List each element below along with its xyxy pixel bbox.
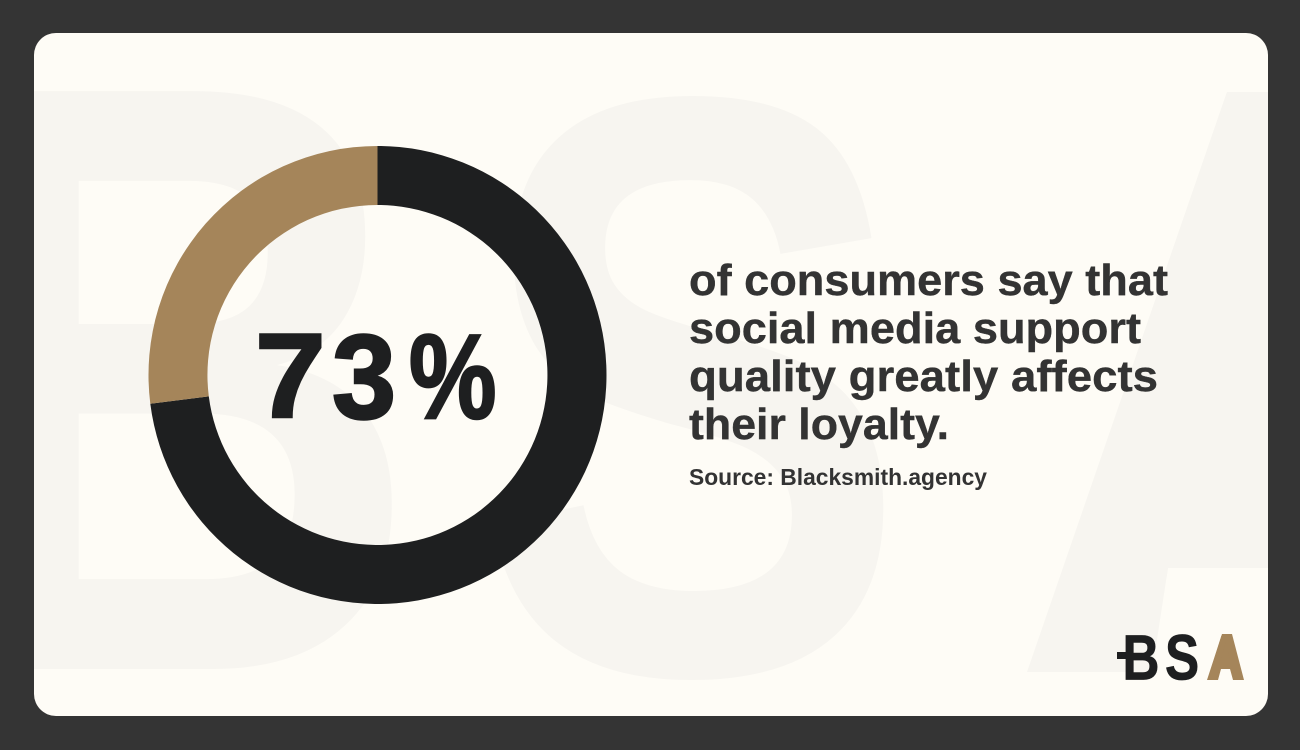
logo: BSA: A: [1207, 624, 1244, 694]
big number: 7: [255, 309, 326, 443]
donut chart: 73%: [148, 146, 606, 604]
headline text: quality greatly affects: [689, 352, 1158, 401]
logo: BSA: [1117, 634, 1244, 680]
headline text: [689, 256, 1168, 449]
segment: dark 73%: [150, 146, 606, 604]
big number: [255, 309, 496, 444]
logo: BSA: S: [1165, 623, 1199, 694]
headline text: of consumers say that: [689, 256, 1168, 305]
headline text: their loyalty.: [689, 400, 949, 449]
headline text: social media support: [689, 304, 1141, 353]
big number: %: [409, 311, 496, 444]
big number: 3: [332, 310, 396, 444]
segment: gold 27%: [148, 146, 378, 404]
source note: Source: Blacksmith.agency: [689, 464, 987, 490]
logo: BSA: B: [1122, 623, 1159, 694]
